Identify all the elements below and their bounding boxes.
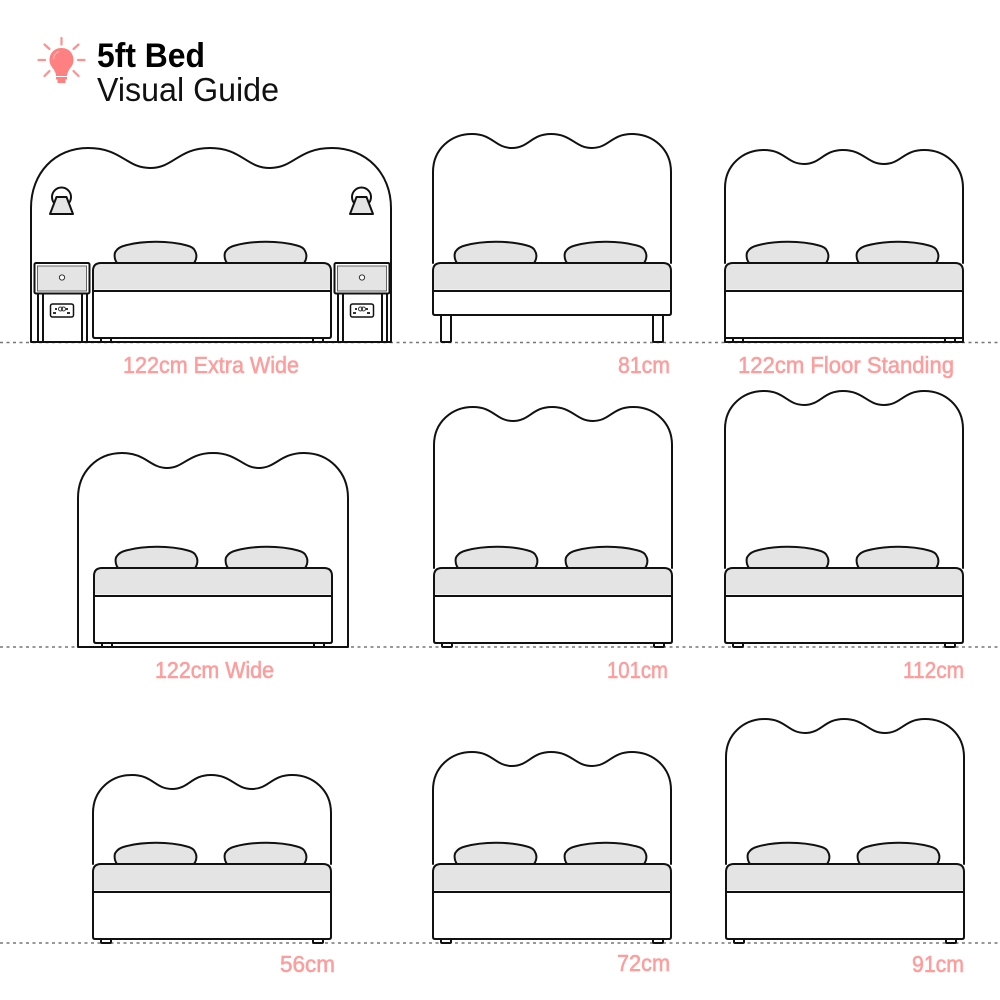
headboard <box>725 391 963 568</box>
bed: 112cm <box>725 391 963 647</box>
label: 122cm Floor Standing: 122cm Floor Standing <box>738 352 954 378</box>
bed: 81cm <box>433 134 671 342</box>
icon: light bulb <box>38 38 84 83</box>
mattress and base <box>725 242 963 342</box>
mattress and base <box>93 242 331 342</box>
headboard <box>434 407 672 568</box>
label: 101cm: 101cm <box>607 657 668 683</box>
headboard <box>725 150 963 263</box>
label: 122cm Extra Wide: 122cm Extra Wide <box>123 352 299 378</box>
title: 5ft Bed <box>97 37 205 75</box>
mattress and base <box>434 547 672 647</box>
nightstand: left <box>34 263 90 342</box>
headboard <box>726 719 964 864</box>
label: 91cm: 91cm <box>912 951 964 977</box>
mattress and base <box>726 843 964 943</box>
label: 122cm Wide: 122cm Wide <box>155 657 274 683</box>
nightstand: right <box>334 263 390 342</box>
bed: 122cm Floor Standing <box>725 150 963 342</box>
label: 56cm: 56cm <box>280 951 335 977</box>
label: 72cm: 72cm <box>617 950 670 976</box>
bed: 101cm <box>434 407 672 647</box>
bed: 56cm <box>93 775 331 943</box>
bed: 122cm Wide <box>78 453 348 647</box>
mattress and base <box>93 843 331 943</box>
bed: 122cm Extra Wide <box>31 148 391 342</box>
label: 112cm: 112cm <box>903 657 964 683</box>
headboard <box>93 775 331 864</box>
lamp: left <box>50 188 73 214</box>
headboard <box>78 453 348 647</box>
mattress and base <box>725 547 963 647</box>
lamp: right <box>350 188 373 214</box>
headboard <box>433 752 671 864</box>
mattress and base <box>433 843 671 943</box>
subtitle: Visual Guide <box>97 71 279 108</box>
mattress and base <box>433 242 671 342</box>
headboard <box>31 148 391 342</box>
label: 81cm: 81cm <box>618 352 670 378</box>
mattress and base <box>94 547 332 647</box>
bed: 91cm <box>726 719 964 943</box>
bed: 72cm <box>433 752 671 943</box>
headboard <box>433 134 671 263</box>
